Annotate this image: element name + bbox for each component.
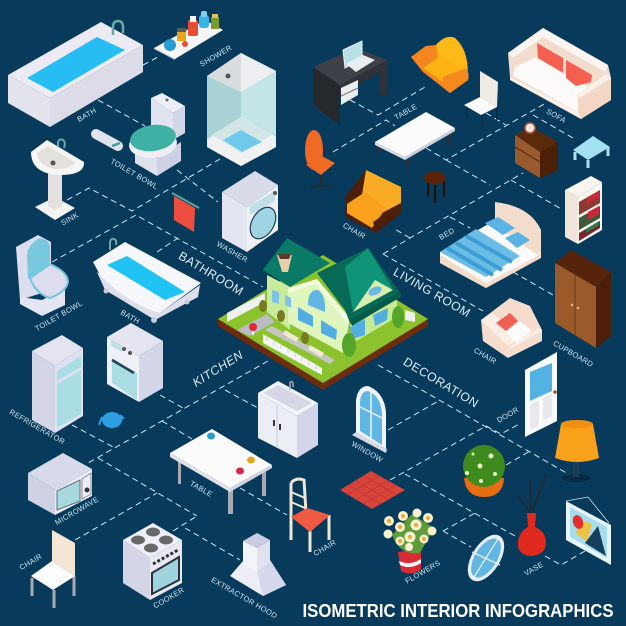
labels: WASHER xyxy=(215,239,250,264)
stool xyxy=(424,172,446,203)
nightstand with clock xyxy=(515,123,558,178)
sink xyxy=(31,139,84,220)
labels: CHAIR xyxy=(341,221,367,241)
red bricks xyxy=(340,471,405,509)
vase xyxy=(518,475,546,556)
sofa xyxy=(508,28,611,119)
round plant xyxy=(463,445,505,497)
oven xyxy=(107,323,163,402)
table kitchen xyxy=(170,429,272,514)
office chair xyxy=(305,130,335,188)
labels: VASE xyxy=(523,560,545,578)
shower xyxy=(207,53,276,166)
bath 2 xyxy=(93,239,201,323)
labels: MICROWAVE xyxy=(53,495,100,527)
chair red xyxy=(291,479,330,552)
labels: TOILET BOWL xyxy=(109,157,160,191)
section heading: decoration: DECORATION xyxy=(401,355,481,411)
cupboard xyxy=(555,250,611,348)
labels: SINK xyxy=(59,210,80,227)
towel xyxy=(172,193,199,232)
bookshelf xyxy=(565,176,602,244)
labels: CHAIR xyxy=(472,346,498,366)
labels: BATH xyxy=(119,308,141,326)
labels: COOKER xyxy=(152,585,186,610)
labels: FLOWERS xyxy=(404,558,442,586)
toilet 2 xyxy=(16,235,68,316)
bed xyxy=(440,202,541,288)
labels: CHAIR xyxy=(312,538,338,558)
chair white-cream xyxy=(31,530,75,608)
white chair xyxy=(464,71,498,128)
labels: TOILET BOWL xyxy=(33,299,84,333)
labels: SOFA xyxy=(545,107,568,125)
kettle xyxy=(99,412,124,428)
labels: WINDOW xyxy=(350,439,385,465)
desk with laptop xyxy=(313,41,387,125)
refrigerator xyxy=(32,335,83,433)
labels: CUPBOARD xyxy=(552,339,595,369)
labels: SHOWER xyxy=(198,43,234,69)
microwave xyxy=(28,453,92,515)
labels: TABLE xyxy=(393,102,419,122)
oval window xyxy=(460,529,512,587)
extractor hood xyxy=(230,533,286,596)
connector lines xyxy=(52,57,585,565)
labels: REFRIGERATOR xyxy=(8,407,67,446)
toilet paper xyxy=(96,134,120,146)
cooker xyxy=(123,523,182,600)
flowers xyxy=(384,508,436,574)
labels: BED xyxy=(437,226,456,242)
white table xyxy=(375,112,455,167)
section heading: kitchen: KITCHEN xyxy=(190,348,246,390)
labels: CHAIR xyxy=(18,552,44,572)
beige chair xyxy=(481,298,542,358)
toilet 1 xyxy=(128,93,185,176)
labels: TABLE xyxy=(188,479,214,499)
bath 1 xyxy=(8,21,143,127)
washer xyxy=(222,171,281,252)
labels: BATH xyxy=(76,106,98,124)
picture xyxy=(566,497,611,565)
section heading: living room: LIVING ROOM xyxy=(391,265,473,320)
window xyxy=(352,386,387,453)
sink cabinet xyxy=(258,381,318,458)
blue table xyxy=(573,136,610,168)
orange armchair xyxy=(411,37,469,93)
brown armchair xyxy=(345,170,401,233)
labels: EXTRACTOR HOOD xyxy=(210,575,279,621)
labels: DOOR xyxy=(495,405,521,425)
house island xyxy=(218,238,428,390)
door xyxy=(525,352,557,437)
lamp xyxy=(555,420,599,482)
shelf with bottles xyxy=(154,11,223,60)
section heading: bathroom: BATHROOM xyxy=(176,249,246,299)
